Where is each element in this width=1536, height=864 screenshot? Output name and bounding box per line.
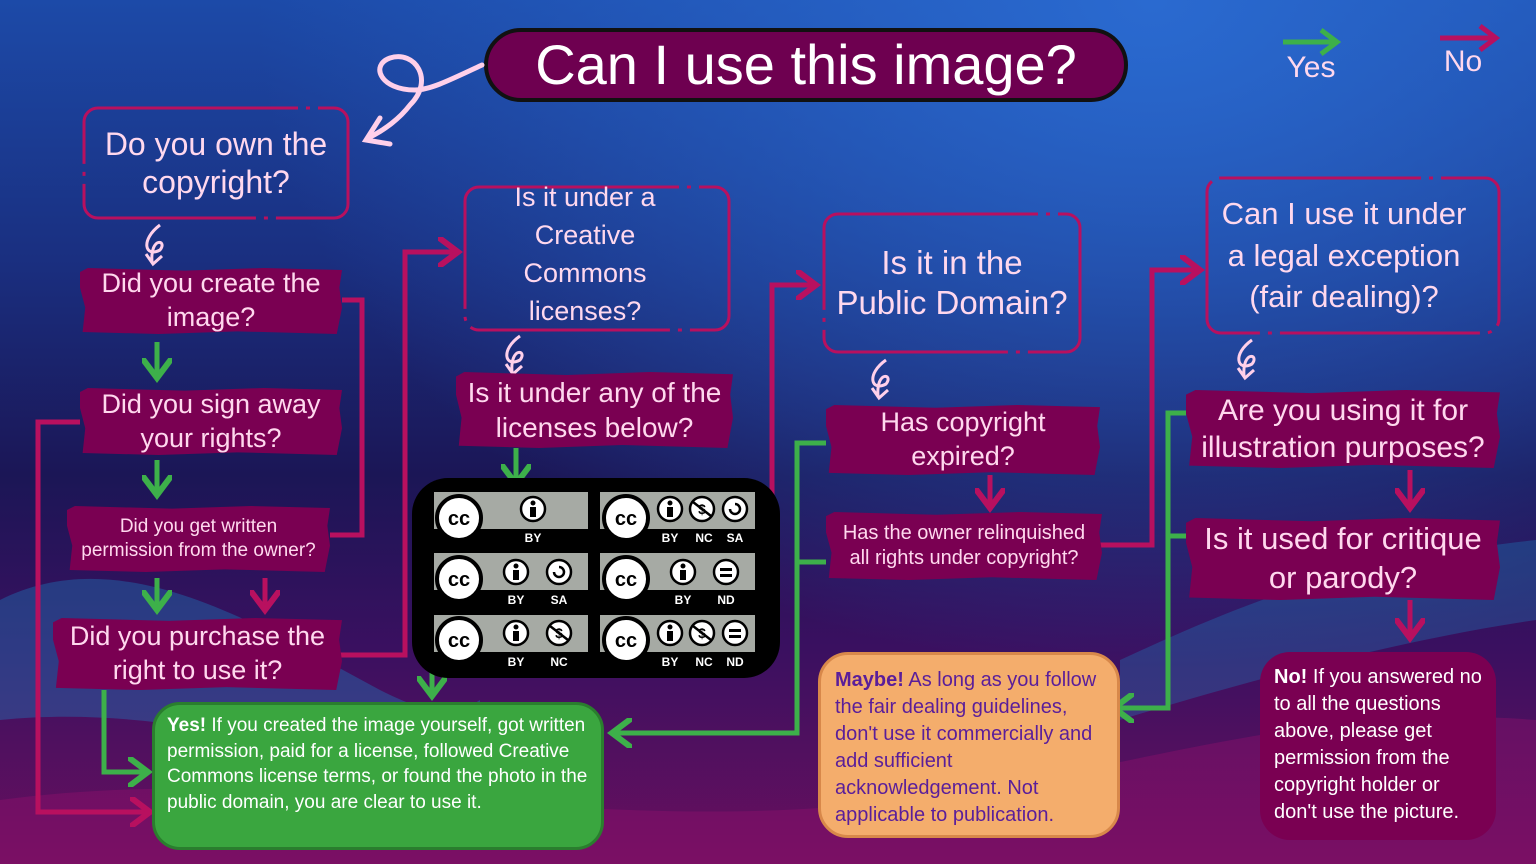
question: fair dealing <box>1222 196 1466 314</box>
question: creative commons: Creative <box>535 220 635 250</box>
banner: critique: or parody? <box>1269 560 1417 595</box>
panel: CC licenses: ND <box>726 655 744 669</box>
banner: written permission: Did you get written <box>120 516 277 537</box>
question: own copyright: copyright? <box>142 164 290 200</box>
banner: relinquished: Has the owner relinquished <box>843 522 1085 544</box>
question: own copyright: Do you own the <box>105 126 327 162</box>
question: creative commons: Is it under a <box>514 182 656 212</box>
banner: any license: Is it under any of the <box>468 377 721 408</box>
callout: yes: Yes! If you created the image yourself, got written permission, paid for a license, followed Creative Commons license terms, or found the photo in the public domain, you are clear to use it. <box>167 715 587 813</box>
banner: critique: Is it used for critique <box>1204 521 1482 556</box>
banner: critique <box>1186 518 1500 600</box>
banner: purchase: Did you purchase the <box>70 621 325 651</box>
banner: illustration: Are you using it for <box>1218 394 1468 426</box>
banner: written permission: permission from the owner? <box>81 540 316 561</box>
question: public domain: Is it in the <box>881 244 1023 281</box>
legend: yes <box>1283 28 1341 84</box>
question: public domain: Public Domain? <box>836 284 1068 321</box>
callout: no: No! If you answered no to all the questions above, please get permission from the copyright holder or don't use the picture. <box>1274 666 1482 823</box>
banner: create <box>80 268 342 334</box>
panel: CC licenses: BY <box>508 593 524 607</box>
question: fair dealing: Can I use it under <box>1222 196 1466 231</box>
panel: CC licenses: SA <box>727 531 744 545</box>
banner: sign away <box>80 388 342 455</box>
banner: any license <box>456 372 733 448</box>
question: fair dealing: a legal exception <box>1228 238 1460 273</box>
question: own copyright <box>105 126 327 200</box>
panel: CC licenses: BY <box>662 655 678 669</box>
question: public domain <box>836 244 1068 321</box>
banner: create: Did you create the <box>101 268 321 298</box>
panel: CC licenses: NC <box>695 531 713 545</box>
panel: CC licenses: BY <box>662 531 678 545</box>
panel: CC licenses: BY <box>525 531 541 545</box>
panel: CC licenses: NC <box>695 655 713 669</box>
icon: pink loop arrow <box>362 54 484 146</box>
callout: maybe: Maybe! As long as you follow the fair dealing guidelines, don't use it commercially and add sufficient acknowledgement. Not applicable to publication. <box>835 669 1096 826</box>
panel: CC licenses: NC <box>550 655 568 669</box>
legend: no: No <box>1444 45 1482 78</box>
panel: CC licenses: BY <box>508 655 524 669</box>
legend: no <box>1440 24 1500 78</box>
banner: copyright expired <box>826 405 1100 475</box>
panel: CC licenses: BY <box>675 593 691 607</box>
banner: sign away: Did you sign away <box>101 389 321 419</box>
panel: CC licenses: SA <box>551 593 568 607</box>
banner: purchase: right to use it? <box>113 655 282 685</box>
banner: any license: licenses below? <box>496 412 693 443</box>
banner: copyright expired: Has copyright <box>880 407 1046 437</box>
banner: relinquished: all rights under copyright? <box>849 547 1078 569</box>
question: creative commons: Commons <box>523 258 646 288</box>
question: fair dealing: (fair dealing)? <box>1249 279 1439 314</box>
question: creative commons <box>514 182 656 326</box>
banner: create: image? <box>167 302 255 332</box>
banner: sign away: your rights? <box>140 422 282 452</box>
banner: copyright expired: expired? <box>911 441 1015 471</box>
panel: CC licenses <box>412 478 780 678</box>
legend: yes: Yes <box>1287 51 1335 84</box>
banner: purchase <box>53 618 342 690</box>
question: creative commons: licenses? <box>529 296 641 326</box>
banner: illustration: illustration purposes? <box>1201 431 1485 464</box>
banner: relinquished <box>826 512 1102 580</box>
panel: CC licenses: ND <box>717 593 735 607</box>
callout: yes <box>152 702 604 850</box>
title: Can I use this image? <box>535 33 1077 96</box>
banner: illustration <box>1186 390 1500 468</box>
banner: written permission <box>67 506 330 572</box>
